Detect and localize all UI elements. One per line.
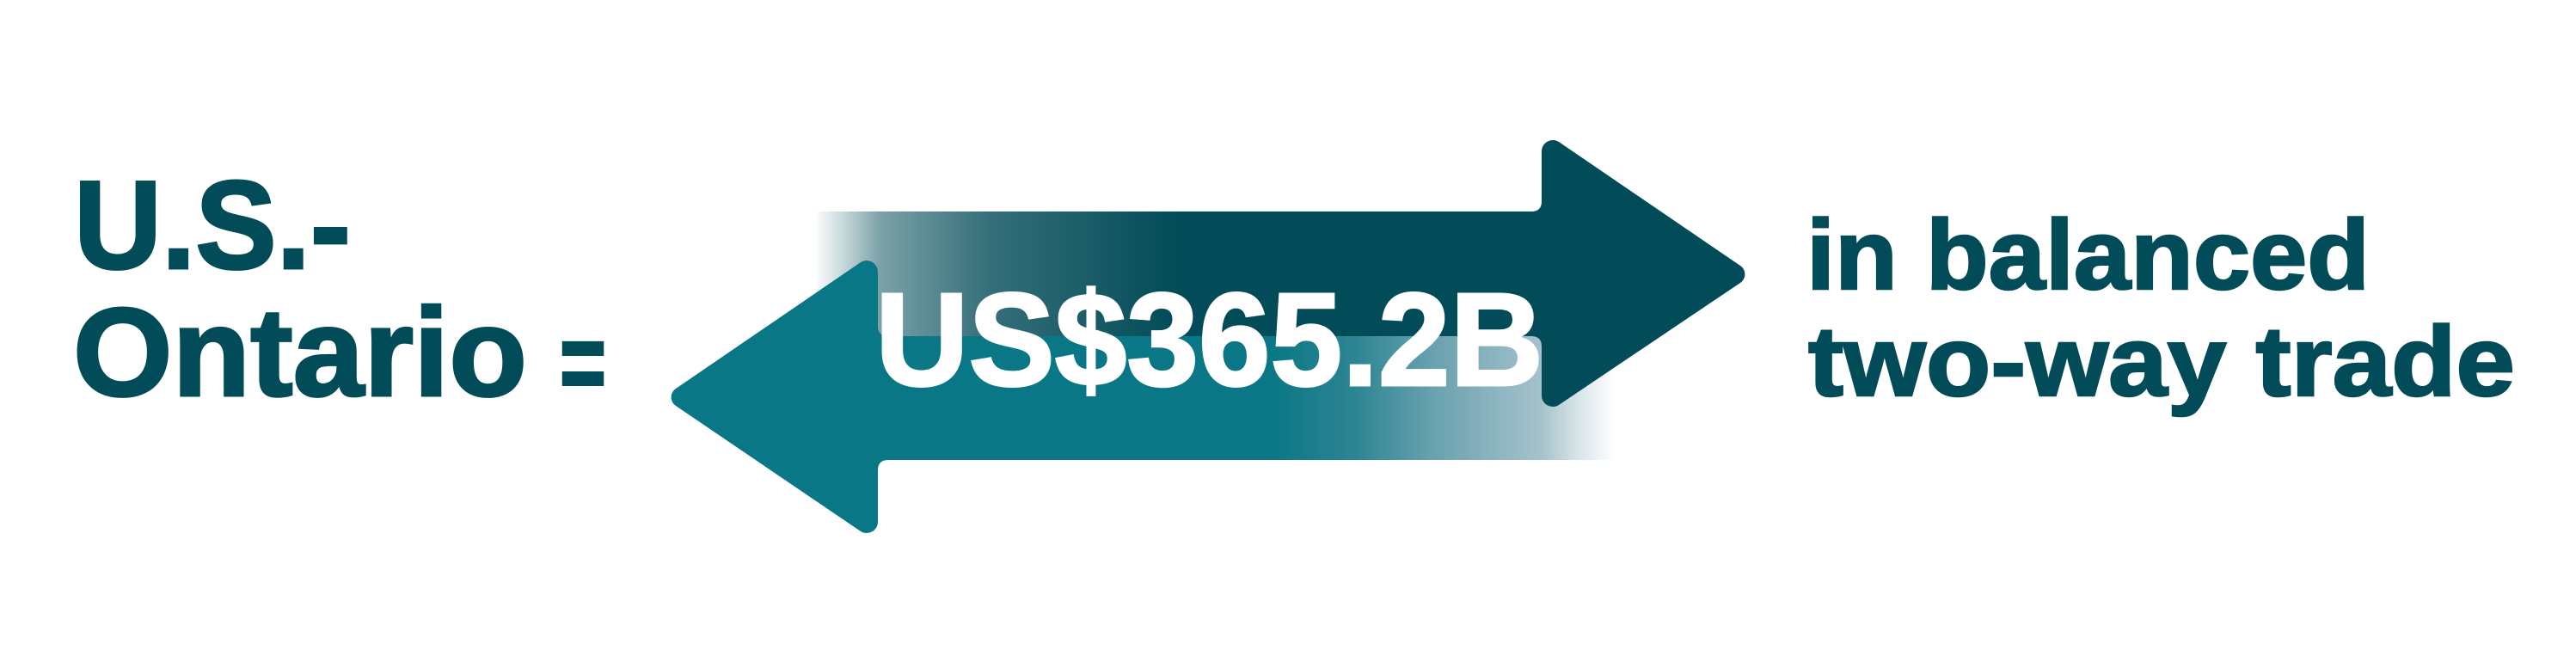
arrow: teal left-pointing arrow fading to the right <box>672 261 1615 533</box>
value: US$365.2B: US$365.2B <box>875 266 1543 414</box>
heading: U.S.-Ontario =: Ontario <box>73 282 527 422</box>
heading: U.S.-Ontario =: = <box>560 299 606 425</box>
heading: U.S.-Ontario =: U.S.- <box>74 155 351 295</box>
text: in balanced two-way trade: in balanced <box>1806 200 2370 310</box>
text: in balanced two-way trade <box>1806 200 2515 417</box>
heading: U.S.-Ontario = <box>73 155 606 425</box>
text: in balanced two-way trade: two-way trade <box>1808 307 2515 417</box>
arrow: dark right-pointing arrow fading to the left <box>814 140 1745 407</box>
